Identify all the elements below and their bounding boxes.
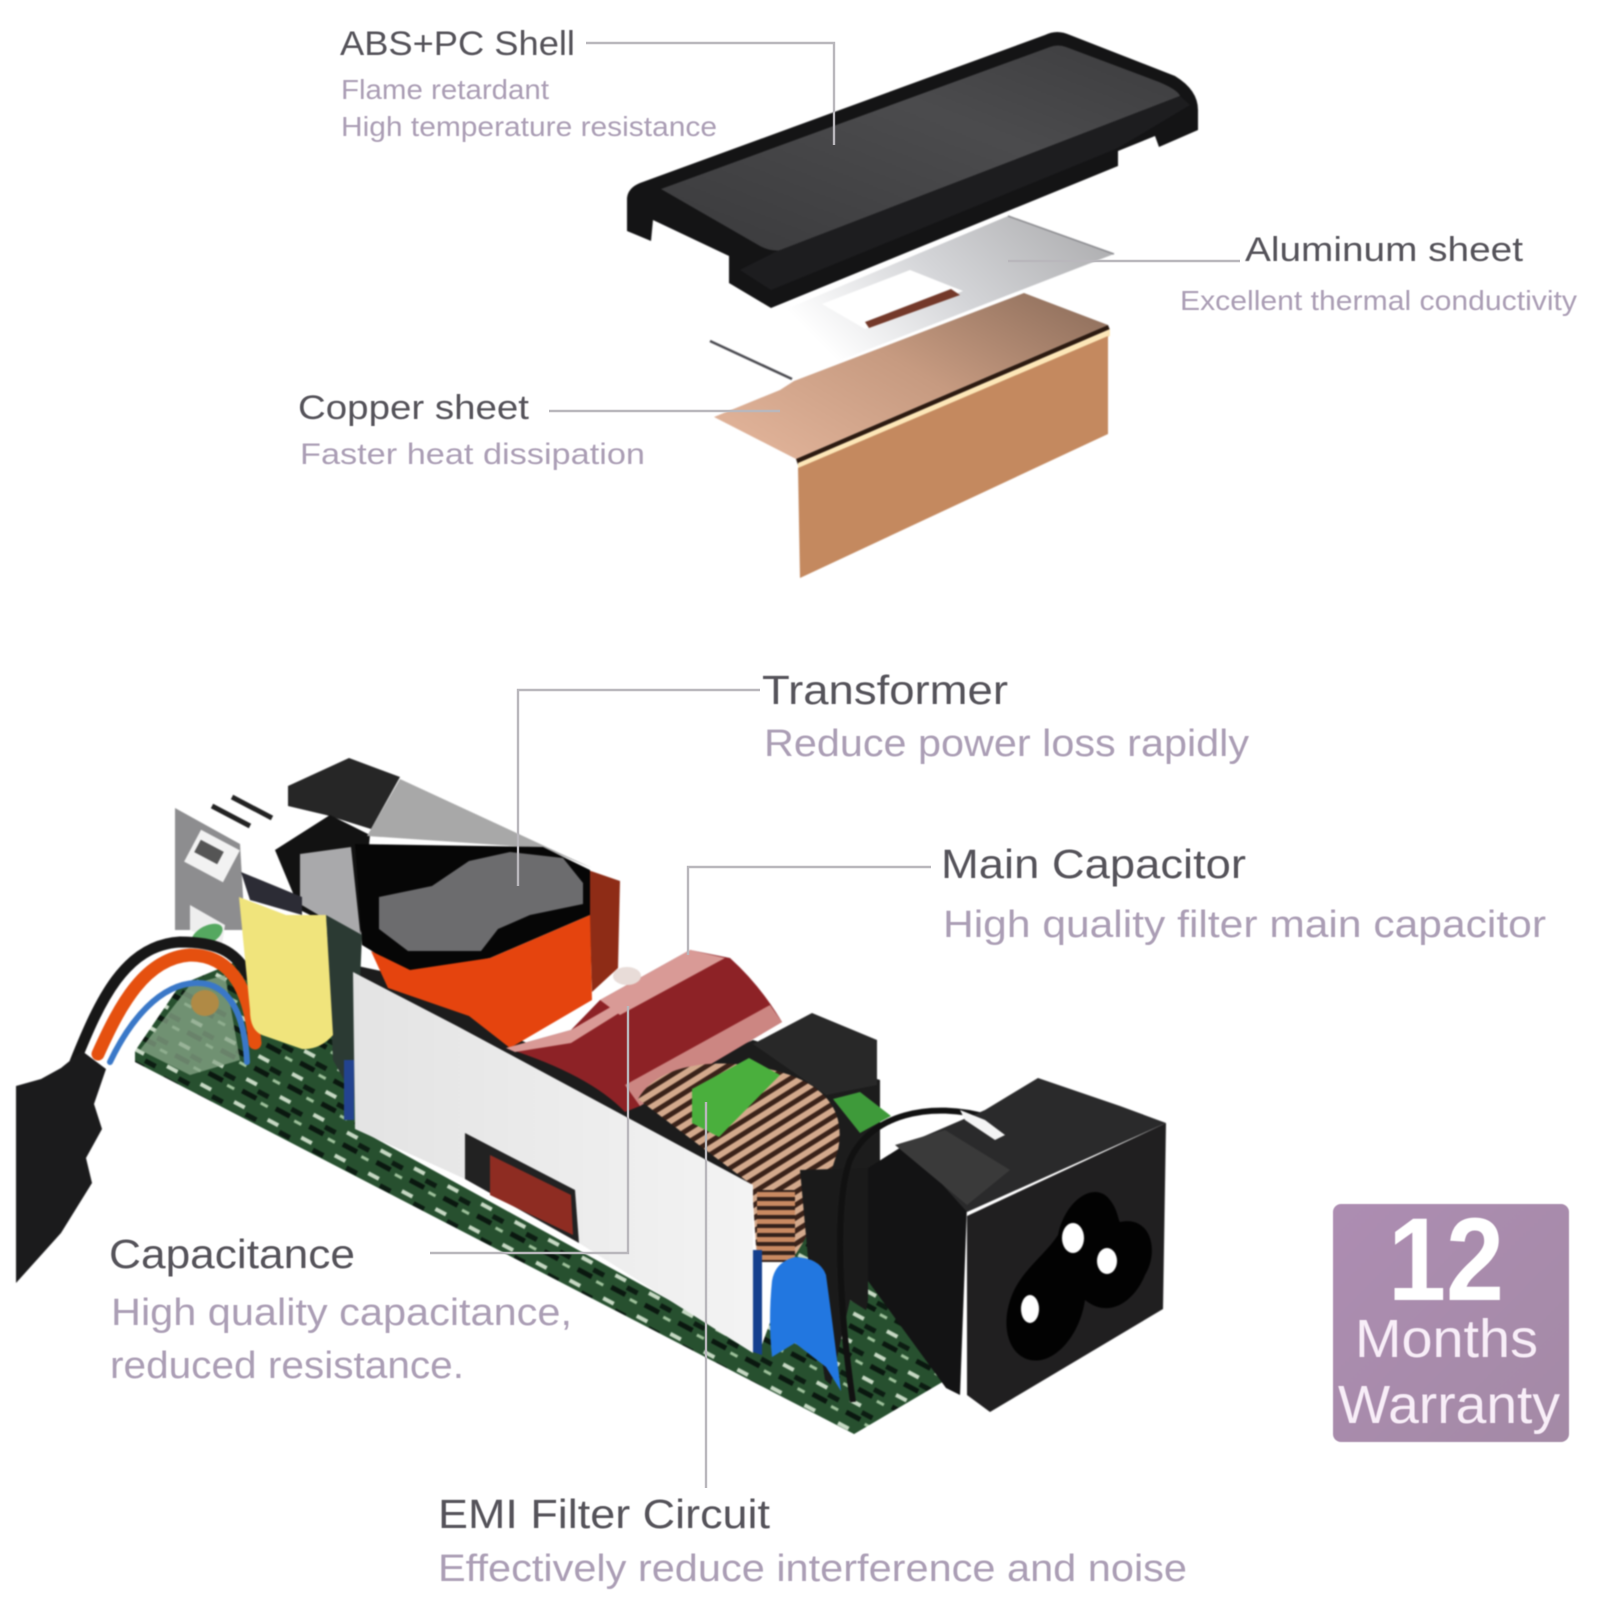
- callout: Main Capacitor: [941, 841, 1546, 946]
- callout: Aluminum sheet: Excellent thermal conductivity: [1180, 285, 1577, 316]
- transformer black top: [355, 844, 590, 975]
- socket slit highlight: [960, 1110, 1005, 1140]
- socket pins: [1062, 1223, 1084, 1253]
- socket wire: [840, 1111, 990, 1402]
- top exploded view: shell, aluminum and copper: [627, 32, 1198, 578]
- callout: EMI Filter Circuit: Effectively reduce interference and noise: [438, 1548, 1187, 1590]
- callout: Capacitance: reduced resistance.: [110, 1345, 464, 1387]
- light green board area: [140, 975, 240, 1075]
- warranty badge: Months: [1355, 1309, 1538, 1369]
- warranty badge: [1333, 1194, 1569, 1442]
- blue safety capacitor: [770, 1257, 841, 1391]
- bottom view: circuit board assembly: [16, 758, 1166, 1434]
- warranty badge: Warranty: [1338, 1375, 1560, 1435]
- dark interior behind shield: [275, 815, 370, 940]
- callout: Copper sheet: Copper sheet: [298, 389, 530, 427]
- red side wall: [588, 870, 620, 992]
- gold component: [191, 990, 219, 1016]
- copper sheet: [714, 293, 1110, 578]
- dark area next to coil: [800, 1168, 868, 1400]
- dark backing behind components: [353, 965, 880, 1195]
- callout: Capacitance: High quality capacitance,: [111, 1292, 572, 1334]
- top dark wedge: [288, 758, 400, 829]
- blue side component: [344, 1060, 354, 1120]
- cable boot: [16, 1051, 106, 1283]
- dark section between yellow and panel: [326, 915, 362, 1100]
- dark blue strip: [753, 1250, 762, 1355]
- leader lines: [430, 43, 1240, 1488]
- callout: Copper sheet: [298, 389, 645, 471]
- dark strip above yellow capacitor: [241, 872, 302, 915]
- callout: Transformer: Reduce power loss rapidly: [764, 723, 1249, 765]
- wires: [75, 942, 255, 1062]
- callout: Aluminum sheet: [1180, 231, 1577, 316]
- callout: ABS+PC Shell: High temperature resistance: [341, 111, 717, 142]
- circuit board: [135, 960, 950, 1434]
- callout: ABS+PC Shell: [340, 25, 717, 142]
- small green part: [833, 1092, 891, 1133]
- socket opening: [1006, 1192, 1152, 1361]
- panel notch with capacitance: [465, 1133, 579, 1243]
- callout: Transformer: Transformer: [762, 667, 1008, 713]
- callout: Transformer: [762, 667, 1249, 765]
- board corner components: [825, 1300, 945, 1434]
- transformer core: [379, 852, 583, 951]
- callout: EMI Filter Circuit: [438, 1491, 1187, 1590]
- green component by wires: [188, 919, 226, 951]
- callout: Main Capacitor: High quality filter main capacitor: [943, 904, 1546, 946]
- callout: ABS+PC Shell: Flame retardant: [341, 74, 549, 105]
- ABS+PC shell: [627, 32, 1198, 308]
- callout: EMI Filter Circuit: EMI Filter Circuit: [438, 1491, 771, 1537]
- metal back shield: [175, 797, 272, 945]
- toroid coil: [638, 1064, 840, 1262]
- black block: [753, 1013, 877, 1095]
- gray left plate: [300, 847, 361, 940]
- callout: Capacitance: Capacitance: [109, 1231, 355, 1277]
- C6 power socket: [868, 1078, 1166, 1412]
- top gray shield: [367, 779, 592, 868]
- callout: Main Capacitor: Main Capacitor: [941, 841, 1246, 887]
- callout: Aluminum sheet: Aluminum sheet: [1245, 231, 1524, 269]
- transformer orange winding: [371, 915, 592, 1048]
- main capacitor: [506, 950, 782, 1112]
- warranty badge: 12: [1388, 1194, 1504, 1326]
- aluminum sheet: [710, 216, 1114, 379]
- callout: ABS+PC Shell: ABS+PC Shell: [340, 25, 575, 63]
- green part: [692, 1058, 780, 1137]
- white insulating panel: [353, 972, 753, 1353]
- yellow capacitor: [239, 897, 333, 1049]
- callout: Copper sheet: Faster heat dissipation: [300, 438, 645, 471]
- callout: Capacitance: [109, 1231, 572, 1387]
